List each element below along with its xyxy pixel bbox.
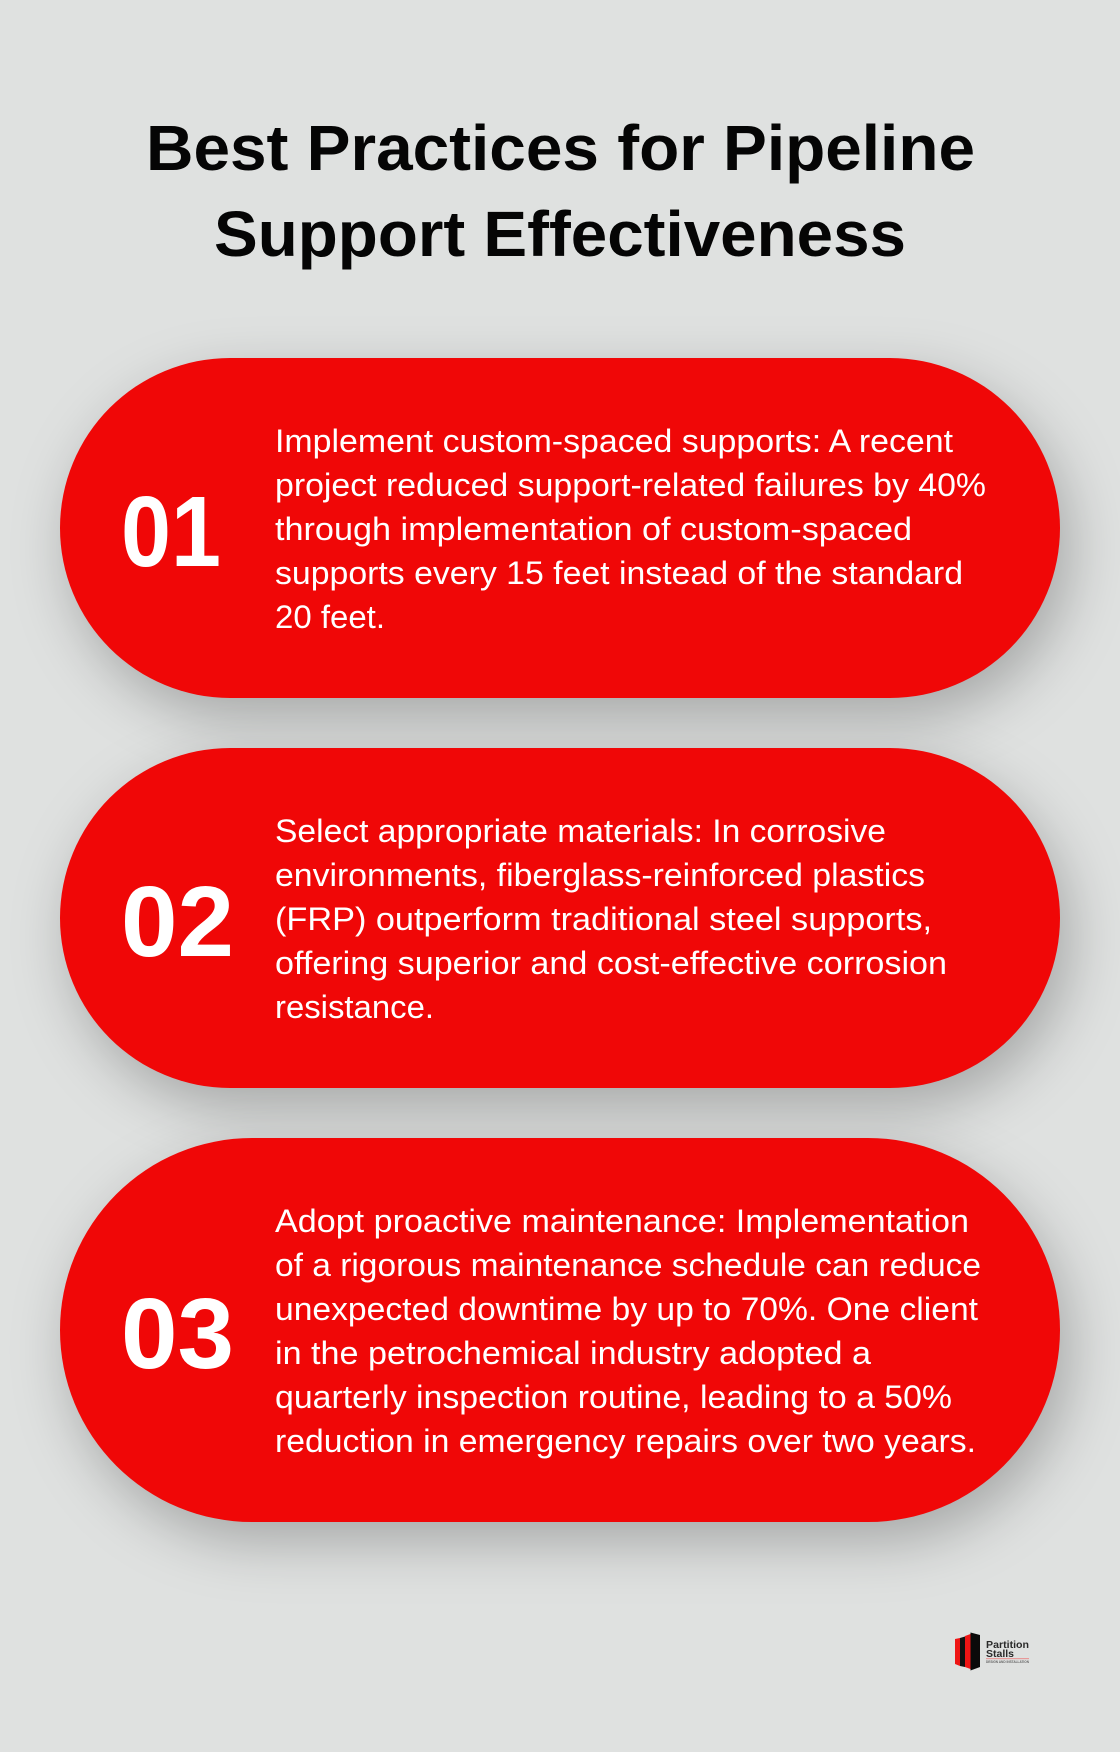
text block: appropriate materials: Select appropriate materials: In corrosive <box>275 813 886 849</box>
number 01: 01 <box>121 476 221 588</box>
logo wordmark <box>986 1639 1029 1664</box>
text block: proactive maintenance: of a rigorous maintenance schedule can reduce <box>275 1247 981 1283</box>
icon: partition panels <box>955 1632 980 1670</box>
text block: appropriate materials: offering superior and cost-effective corrosion <box>275 945 947 981</box>
title: Support Effectiveness <box>214 198 906 270</box>
text block: appropriate materials: (FRP) outperform traditional steel supports, <box>275 901 932 937</box>
text block: appropriate materials: environments, fiberglass-reinforced plastics <box>275 857 925 893</box>
panel: practice 01 <box>60 358 1060 698</box>
logo wordmark: Partition <box>986 1639 1029 1651</box>
text block: custom-spaced supports: 20 feet. <box>275 599 385 635</box>
text block: proactive maintenance: unexpected downtime by up to 70%. One client <box>275 1291 978 1327</box>
text block: custom-spaced supports: through implementation of custom-spaced <box>275 511 912 547</box>
text block: custom-spaced supports: Implement custom-spaced supports: A recent <box>275 423 953 459</box>
text block: proactive maintenance: Adopt proactive maintenance: Implementation <box>275 1203 969 1239</box>
text block: appropriate materials <box>275 813 947 1025</box>
text block: custom-spaced supports <box>275 423 986 635</box>
text block: appropriate materials: resistance. <box>275 989 434 1025</box>
panel: practice 02 <box>60 748 1060 1088</box>
logo wordmark: Stalls <box>986 1648 1014 1660</box>
logo wordmark: DESIGN AND INSTALLATION <box>986 1660 1029 1664</box>
number 02: 02 <box>121 866 234 978</box>
logo: Partition Stalls <box>955 1632 1029 1670</box>
title <box>146 112 975 270</box>
panel: practice 03 <box>60 1138 1060 1522</box>
text block: proactive maintenance: quarterly inspection routine, leading to a 50% <box>275 1379 952 1415</box>
text block: proactive maintenance: in the petrochemical industry adopted a <box>275 1335 871 1371</box>
text block: custom-spaced supports: project reduced support-related failures by 40% <box>275 467 986 503</box>
text block: proactive maintenance: reduction in emergency repairs over two years. <box>275 1423 976 1459</box>
text block: proactive maintenance <box>275 1203 981 1459</box>
title: Best Practices for Pipeline <box>146 112 975 184</box>
text block: custom-spaced supports: supports every 15 feet instead of the standard <box>275 555 963 591</box>
number 03: 03 <box>121 1278 234 1390</box>
